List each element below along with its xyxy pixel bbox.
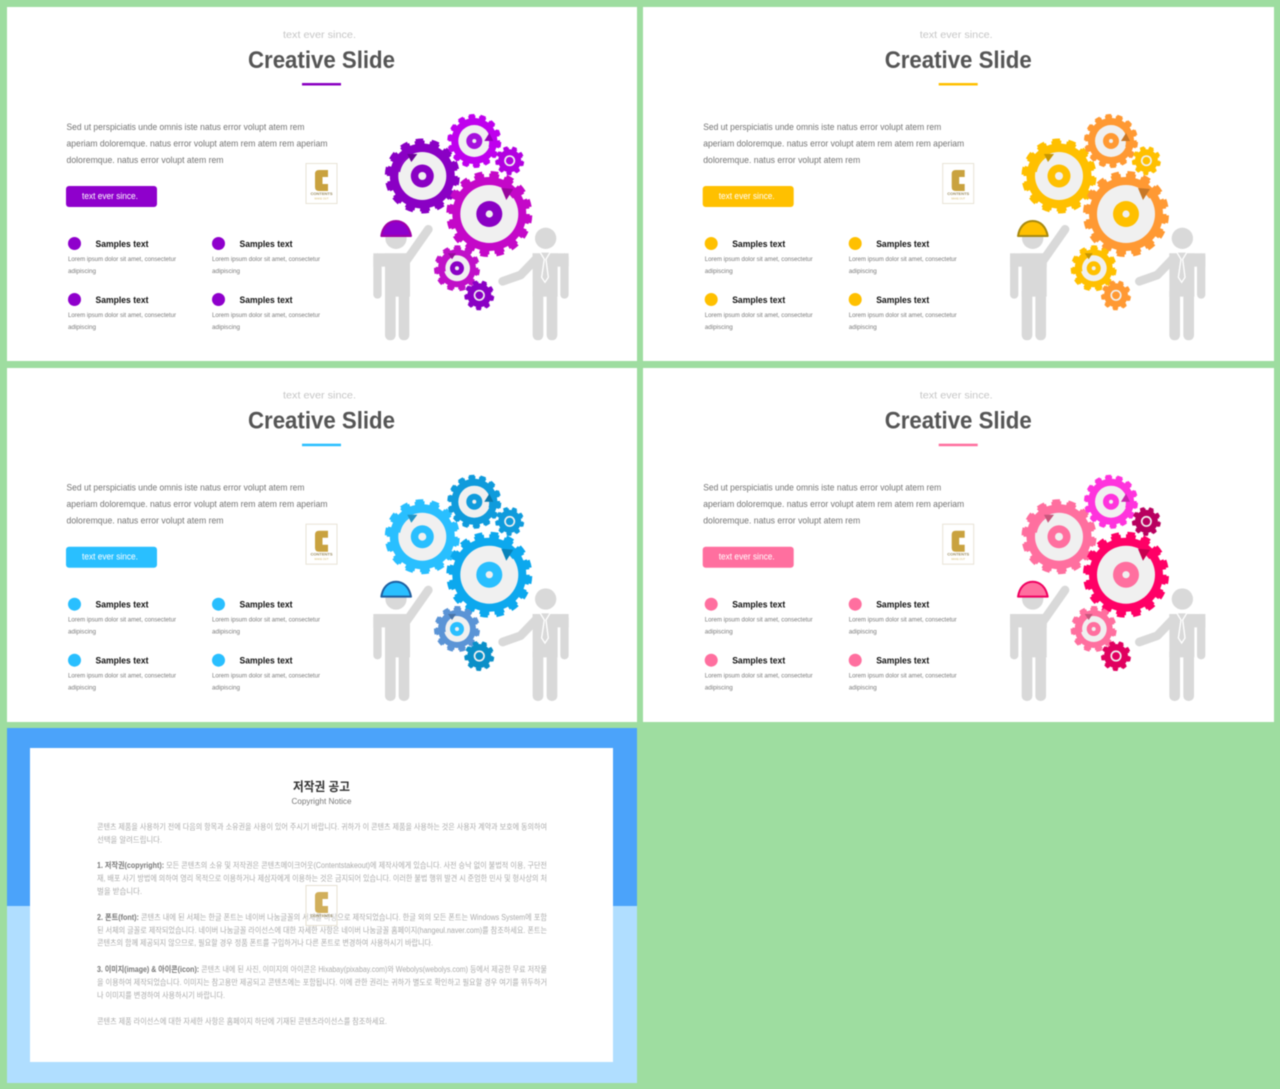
list item 1: Lorem ipsum dolor sit amet, consectetur bbox=[705, 257, 813, 263]
list item 1: adipiscing bbox=[68, 630, 96, 636]
title underline bbox=[302, 444, 341, 446]
list item 3 bbox=[705, 654, 813, 692]
list item 1: Samples text bbox=[96, 600, 149, 611]
list item 4: adipiscing bbox=[849, 686, 877, 692]
list item 1: Samples text bbox=[732, 600, 786, 611]
notice subheading: Copyright Notice bbox=[292, 796, 352, 806]
body paragraph: doloremque. natus error volupt atem rem bbox=[66, 155, 224, 166]
list item 1: adipiscing bbox=[705, 269, 733, 275]
subtitle: text ever since. bbox=[920, 391, 993, 402]
list item 4: Samples text bbox=[876, 656, 930, 667]
list item 3: Lorem ipsum dolor sit amet, consectetur bbox=[705, 674, 813, 680]
body paragraph: Sed ut perspiciatis unde omnis iste natus error volupt atem rem bbox=[703, 483, 941, 494]
title: Creative Slide bbox=[248, 408, 395, 435]
list item 1: Lorem ipsum dolor sit amet, consectetur bbox=[68, 257, 176, 263]
list item 4: Lorem ipsum dolor sit amet, consectetur bbox=[212, 313, 320, 319]
list item 3: adipiscing bbox=[68, 686, 96, 692]
list item 3: Samples text bbox=[732, 656, 786, 667]
panel: purple slide bbox=[7, 7, 637, 361]
list item 3 bbox=[68, 293, 176, 331]
list item 2: Lorem ipsum dolor sit amet, consectetur bbox=[849, 257, 957, 263]
notice heading: 저작권 공고 bbox=[293, 779, 350, 794]
button bbox=[66, 186, 157, 207]
panel: pink slide bbox=[643, 368, 1274, 722]
body paragraph bbox=[703, 122, 964, 166]
intro paragraph: 콘텐츠 제품을 사용하기 전에 다음의 항목과 소유권을 사용이 있어 주시기 바랍니다. 귀하가 이 콘텐츠 제품을 사용하는 것은 사용자 계약과 보호에 동의하여 bbox=[97, 822, 547, 832]
subtitle: text ever since. bbox=[283, 30, 356, 41]
list item 4: Samples text bbox=[240, 656, 293, 667]
button: text ever since. bbox=[719, 552, 775, 562]
panel: blue slide bbox=[7, 368, 637, 722]
body paragraph bbox=[66, 122, 328, 166]
title: Creative Slide bbox=[885, 47, 1032, 74]
icon: gears and people bbox=[1010, 115, 1205, 340]
body paragraph: doloremque. natus error volupt atem rem bbox=[66, 516, 224, 527]
list item 4: Lorem ipsum dolor sit amet, consectetur bbox=[212, 674, 320, 680]
list item 1: Lorem ipsum dolor sit amet, consectetur bbox=[68, 618, 176, 624]
list item 2: adipiscing bbox=[849, 269, 877, 275]
list item 4: adipiscing bbox=[212, 686, 240, 692]
section 2 font: 콘텐츠의 함께 제공되지 않으므로, 필요할 경우 정품 폰트를 구입하거나 다른 폰트로 변경하여 사용하시기 바랍니다. bbox=[97, 938, 433, 948]
list item 2 bbox=[849, 237, 957, 275]
logo watermark bbox=[306, 164, 337, 204]
body paragraph: aperiam doloremque. natus error volupt atem rem atem rem aperiam bbox=[66, 499, 328, 510]
list item 4 bbox=[849, 293, 957, 331]
icon: gears and people bbox=[1010, 476, 1205, 701]
body paragraph: doloremque. natus error volupt atem rem bbox=[703, 155, 860, 166]
logo watermark: CONTENTS bbox=[310, 913, 333, 918]
list item 4: Lorem ipsum dolor sit amet, consectetur bbox=[849, 674, 957, 680]
list item 4: Samples text bbox=[240, 295, 293, 306]
list item 1: adipiscing bbox=[705, 630, 733, 636]
list item 4: Lorem ipsum dolor sit amet, consectetur bbox=[849, 313, 957, 319]
logo watermark bbox=[306, 524, 337, 564]
list item 1 bbox=[705, 237, 813, 275]
body paragraph: Sed ut perspiciatis unde omnis iste natus error volupt atem rem bbox=[703, 122, 941, 133]
logo watermark bbox=[943, 164, 974, 204]
subtitle: text ever since. bbox=[920, 30, 993, 41]
section 2 font: 2. 폰트(font): 콘텐츠 내에 된 서체는 한글 폰트는 네이버 나눔글꼴의 서체를 바탕으로 제작되었습니다. 한글 외의 모든 폰트는 Windows System에 포함 bbox=[97, 912, 548, 922]
list item 3: Lorem ipsum dolor sit amet, consectetur bbox=[705, 313, 813, 319]
body paragraph: aperiam doloremque. natus error volupt atem rem atem rem aperiam bbox=[703, 499, 964, 510]
title: Creative Slide bbox=[248, 47, 395, 74]
body paragraph: aperiam doloremque. natus error volupt atem rem atem rem aperiam bbox=[66, 138, 328, 150]
list item 3: Lorem ipsum dolor sit amet, consectetur bbox=[68, 674, 176, 680]
list item 2: Samples text bbox=[876, 600, 930, 611]
list item 1 bbox=[68, 237, 176, 275]
section 2 font bbox=[97, 912, 548, 948]
list item 3: Samples text bbox=[732, 295, 786, 306]
list item 4: Samples text bbox=[876, 295, 930, 306]
body paragraph: doloremque. natus error volupt atem rem bbox=[703, 516, 860, 527]
list item 2 bbox=[212, 598, 320, 636]
list item 4: adipiscing bbox=[212, 325, 240, 331]
title underline bbox=[939, 444, 978, 446]
list item 3: adipiscing bbox=[705, 686, 733, 692]
list item 2: adipiscing bbox=[212, 269, 240, 275]
list item 3: adipiscing bbox=[68, 325, 96, 331]
intro paragraph bbox=[97, 822, 547, 844]
list item 1: Samples text bbox=[732, 239, 786, 250]
list item 4 bbox=[849, 654, 957, 692]
list item 3: adipiscing bbox=[705, 325, 733, 331]
intro paragraph: 선택을 알려드립니다. bbox=[97, 834, 162, 844]
body paragraph: aperiam doloremque. natus error volupt atem rem atem rem aperiam bbox=[703, 138, 964, 150]
button bbox=[703, 186, 794, 207]
subtitle: text ever since. bbox=[283, 391, 356, 402]
section 1 copyright: 재, 배포 사기 방법에 의하여 영리 목적으로 이용하거나 제삼자에게 이용하는 것은 금지되어 있습니다. 이러한 불법 행위 발견 시 준엄한 민사 및 형사상의 처 bbox=[97, 873, 547, 883]
section 3 image and icon: 3. 이미지(image) & 아이콘(icon): 콘텐츠 내에 된 사진, 이미지의 아이콘은 Hixabay(pixabay.com)와 Webolys(webolys.com) 등에서 제공한 무료 저작물 bbox=[97, 964, 547, 974]
list item 3 bbox=[68, 654, 176, 692]
section 1 copyright bbox=[97, 860, 547, 896]
list item 2: Lorem ipsum dolor sit amet, consectetur bbox=[212, 257, 320, 263]
logo watermark bbox=[943, 524, 974, 564]
list item 2 bbox=[212, 237, 320, 275]
section 1 copyright: 1. 저작권(copyright): 모든 콘텐츠의 소유 및 저작권은 콘텐츠메이크어웃(Contentstakeout)에 제작사에게 있습니다. 사전 승낙 없이 불법적 이용, 구단전 bbox=[97, 860, 547, 870]
list item 4 bbox=[212, 293, 320, 331]
list item 2: Samples text bbox=[876, 239, 930, 250]
button: text ever since. bbox=[82, 552, 138, 562]
list item 2: Samples text bbox=[240, 600, 293, 611]
list item 1 bbox=[705, 598, 813, 636]
closing note: 콘텐츠 제품 라이선스에 대한 자세한 사항은 홈페이지 하단에 기재된 콘텐츠라이선스를 참조하세요. bbox=[97, 1016, 387, 1026]
button: text ever since. bbox=[719, 191, 775, 201]
list item 2: Lorem ipsum dolor sit amet, consectetur bbox=[212, 618, 320, 624]
list item 2 bbox=[849, 598, 957, 636]
icon: gears and people bbox=[373, 476, 569, 701]
section 3 image and icon: 을 이용하여 제작되었습니다. 이미지는 참고용만 제공되고 콘텐츠에는 포함됩니다. 이에 관한 권리는 귀하가 별도로 확인하고 필요할 경우 여기를 위두하거 bbox=[97, 977, 547, 987]
panel: yellow slide bbox=[643, 7, 1274, 361]
list item 2: adipiscing bbox=[212, 630, 240, 636]
list item 3 bbox=[705, 293, 813, 331]
list item 1: Samples text bbox=[96, 239, 149, 250]
body paragraph bbox=[66, 483, 328, 527]
button bbox=[66, 547, 157, 568]
list item 2: Samples text bbox=[240, 239, 293, 250]
button: text ever since. bbox=[82, 191, 138, 201]
list item 4: adipiscing bbox=[849, 325, 877, 331]
list item 3: Samples text bbox=[96, 656, 149, 667]
section 2 font: 된 서체의 글꼴로 제작되었습니다. 네이버 나눔글꼴 라이선스에 대한 자세한 사항은 네이버 나눔글꼴 홈페이지(hangeul.naver.com)를 참조하세요. 폰트는 bbox=[97, 925, 547, 935]
logo watermark bbox=[306, 886, 337, 926]
list item 1 bbox=[68, 598, 176, 636]
section 1 copyright: 벌을 받습니다. bbox=[97, 886, 142, 896]
icon: gears and people bbox=[373, 115, 569, 340]
title: Creative Slide bbox=[885, 408, 1032, 435]
section 3 image and icon bbox=[97, 964, 547, 1000]
panel: copyright notice bbox=[7, 728, 637, 1083]
list item 4 bbox=[212, 654, 320, 692]
section 3 image and icon: 나 이미지를 변경하여 사용하시기 바랍니다. bbox=[97, 990, 225, 1000]
list item 1: adipiscing bbox=[68, 269, 96, 275]
list item 2: adipiscing bbox=[849, 630, 877, 636]
body paragraph: Sed ut perspiciatis unde omnis iste natus error volupt atem rem bbox=[66, 483, 305, 494]
list item 2: Lorem ipsum dolor sit amet, consectetur bbox=[849, 618, 957, 624]
body paragraph bbox=[703, 483, 964, 527]
title underline bbox=[939, 83, 978, 86]
list item 3: Samples text bbox=[96, 295, 149, 306]
button bbox=[703, 547, 794, 568]
body paragraph: Sed ut perspiciatis unde omnis iste natus error volupt atem rem bbox=[66, 122, 305, 133]
list item 1: Lorem ipsum dolor sit amet, consectetur bbox=[705, 618, 813, 624]
title underline bbox=[302, 83, 341, 86]
list item 3: Lorem ipsum dolor sit amet, consectetur bbox=[68, 313, 176, 319]
